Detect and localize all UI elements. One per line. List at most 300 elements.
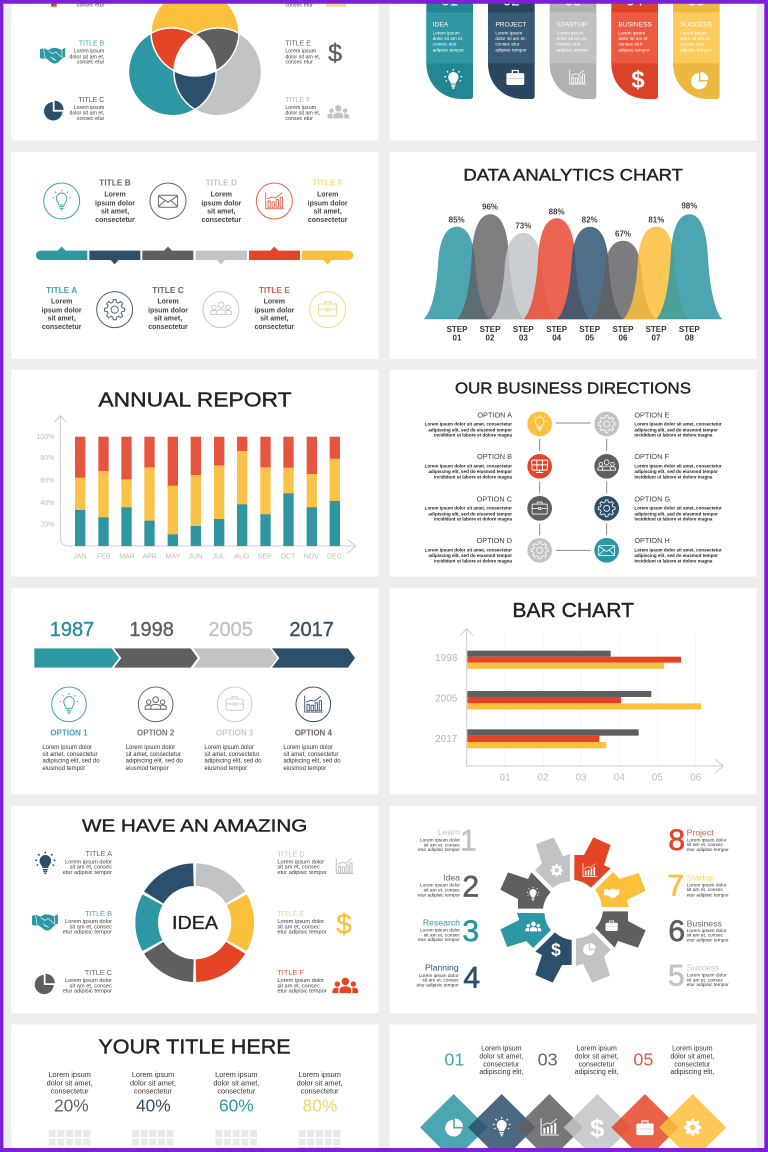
- option text: eiusmod tempor: [283, 766, 326, 772]
- years: 1998: [129, 619, 174, 641]
- step labels: 02: [486, 334, 495, 343]
- number text: adipiscing elit,: [670, 1069, 714, 1076]
- number text: dolor sit amet,: [670, 1054, 714, 1061]
- option text: Lorem ipsum dolor: [42, 745, 92, 751]
- right titles: sit am et, consec: [277, 924, 320, 930]
- left steps: Planning: [425, 963, 459, 973]
- right steps: Lorem ipsum dolor: [687, 838, 727, 844]
- bottom labels: consectetur: [42, 324, 82, 331]
- title: WE HAVE AN AMAZING: [82, 816, 307, 836]
- number text: Lorem ipsum: [481, 1046, 522, 1053]
- percentages: 60%: [219, 1096, 254, 1116]
- left steps: etur adipisic tempor: [418, 937, 460, 943]
- option text: sit amet, consectetur: [283, 752, 339, 758]
- left steps: Research: [423, 917, 460, 927]
- right steps: Startup: [687, 872, 715, 882]
- panel: data analytics chart: [390, 152, 757, 359]
- panel: numbered tabs: [390, 0, 757, 140]
- panel: business directions: [390, 370, 757, 577]
- bottom labels: ipsum dolor: [148, 307, 188, 314]
- option labels: OPTION 4: [295, 728, 333, 737]
- title: YOUR TITLE HERE: [98, 1036, 291, 1058]
- step labels: STEP: [646, 325, 667, 334]
- right steps: 6: [668, 915, 685, 948]
- number text: [479, 1046, 714, 1076]
- left steps: 1: [460, 825, 477, 858]
- left options: adipiscing elit, sed do eiusmod tempor: [428, 469, 512, 474]
- diamond icons: [445, 1115, 701, 1143]
- column text: Lorem ipsum: [48, 1070, 91, 1079]
- bell curves: [424, 214, 722, 319]
- step labels: 07: [652, 334, 661, 343]
- right titles: TITLE F: [277, 968, 304, 977]
- left options: OPTION A: [477, 410, 512, 419]
- top labels: TITLE F: [312, 178, 343, 188]
- option text: Lorem ipsum dolor: [204, 745, 254, 751]
- column text: dolor sit amet,: [130, 1079, 176, 1088]
- bottom labels: sit amet,: [154, 316, 182, 323]
- step labels: STEP: [480, 325, 501, 334]
- step labels: 01: [453, 334, 462, 343]
- number text: Lorem ipsum: [672, 1046, 713, 1053]
- tab 04 business: $: [631, 67, 645, 94]
- option text: sit amet, consectetur: [42, 752, 98, 758]
- axis labels: AUG: [234, 553, 250, 560]
- icon: people: [327, 105, 349, 118]
- right steps: sit am et, consec: [687, 977, 723, 983]
- left steps: etur adipisic tempor: [418, 892, 460, 898]
- column text: consectetur: [51, 1087, 89, 1096]
- left titles: Lorem ipsum dolor: [65, 859, 112, 865]
- percentages: 80%: [303, 1096, 337, 1116]
- tab 04 business: consec etur: [618, 42, 643, 47]
- column text: dolor sit amet,: [297, 1079, 343, 1088]
- tab 02 project: consec etur: [495, 42, 520, 47]
- axis labels: JUN: [189, 553, 202, 560]
- right options: Lorem ipsum dolor sit amet, consectetur: [634, 506, 722, 511]
- icon: handshake: [40, 48, 65, 64]
- bottom labels: [42, 285, 295, 331]
- right options: adipiscing elit, sed do eiusmod tempor: [634, 511, 718, 516]
- node icons: [527, 412, 619, 563]
- segment icons: [525, 863, 619, 960]
- right steps: 7: [667, 870, 684, 903]
- option text: adipiscing elit, sed do: [283, 759, 341, 765]
- right steps: sit am et, consec: [687, 932, 723, 938]
- tab 02 project: PROJECT: [495, 22, 526, 29]
- right steps: Success: [687, 962, 720, 972]
- column text: dolor sit amet,: [213, 1079, 259, 1088]
- left venn labels: TITLE C: [78, 97, 104, 104]
- tab 05 success: Lorem ipsum: [680, 31, 707, 36]
- year labels: 2005: [435, 694, 458, 705]
- column text: Lorem ipsum: [215, 1070, 258, 1079]
- top labels: consectetur: [202, 217, 241, 224]
- panel: annual report: [12, 370, 378, 577]
- step labels: 03: [519, 334, 528, 343]
- panel: gear steps: [390, 806, 757, 1013]
- option text: eiusmod tempor: [42, 766, 85, 772]
- bottom labels: ipsum dolor: [254, 307, 295, 314]
- percent labels: 67%: [615, 229, 631, 238]
- axis labels: [36, 434, 342, 560]
- panel: your title here: [12, 1024, 378, 1152]
- tab 02 project: [488, 0, 535, 99]
- tab 02 project: Lorem ipsum: [495, 31, 522, 36]
- left steps: 4: [463, 962, 480, 995]
- option text: Lorem ipsum dolor: [126, 745, 175, 751]
- right steps: Project: [687, 828, 714, 838]
- tab 04 business: [611, 0, 658, 99]
- axis labels: 80%: [40, 455, 54, 462]
- left venn labels: TITLE B: [79, 41, 105, 48]
- left steps: etur adipisic tempor: [417, 982, 459, 988]
- cropped top labels: consec etur: [285, 3, 313, 9]
- tab 05 success: [673, 0, 720, 99]
- left steps: Learn: [438, 827, 460, 837]
- axis labels: MAY: [166, 553, 181, 560]
- x labels: 02: [537, 772, 549, 783]
- tab 02 project: adipisic tempor: [495, 47, 527, 52]
- left options: Lorem ipsum dolor sit amet, consectetur: [425, 463, 512, 468]
- option labels: OPTION 3: [216, 728, 254, 737]
- left titles: etur adipisic tempor: [63, 930, 112, 936]
- option text: adipiscing elit, sed do: [126, 759, 184, 765]
- step labels: STEP: [679, 325, 700, 334]
- right options: OPTION E: [634, 410, 669, 419]
- axis labels: NOV: [304, 553, 319, 560]
- step labels: [447, 325, 700, 343]
- left steps: sit am et, consec: [424, 932, 461, 938]
- left titles: Lorem ipsum dolor: [65, 919, 112, 925]
- numbers: 05: [633, 1050, 653, 1070]
- years: [50, 619, 334, 641]
- left titles: TITLE B: [85, 909, 112, 918]
- step labels: 08: [685, 334, 694, 343]
- years: 2005: [208, 619, 253, 641]
- top labels: ipsum dolor: [308, 200, 348, 207]
- right options: OPTION H: [634, 536, 670, 545]
- top labels: consectetur: [308, 217, 348, 224]
- tab 01 idea: dolor sit am et,: [433, 36, 463, 41]
- top labels: Lorem: [317, 192, 338, 199]
- number text: adipiscing elit,: [575, 1069, 619, 1076]
- option text: adipiscing elit, sed do: [204, 759, 262, 765]
- left titles: etur adipisic tempor: [63, 870, 112, 876]
- right options: Lorem ipsum dolor sit amet, consectetur: [634, 463, 722, 468]
- panel: bar chart: [390, 588, 757, 794]
- step labels: STEP: [613, 325, 634, 334]
- tab 04 business: BUSINESS: [618, 22, 653, 29]
- axis labels: APR: [142, 553, 157, 560]
- right steps: Business: [687, 918, 722, 928]
- bottom labels: TITLE C: [152, 285, 184, 295]
- years: 2017: [289, 619, 334, 641]
- bottom labels: Lorem: [157, 299, 179, 306]
- left options: Lorem ipsum dolor sit amet, consectetur: [425, 506, 512, 511]
- number text: consectetur: [483, 1061, 520, 1068]
- cropped top labels: [51, 0, 346, 9]
- left options: [425, 410, 513, 563]
- left titles: [63, 849, 113, 995]
- percent labels: 73%: [515, 222, 531, 231]
- bottom labels: Lorem: [51, 299, 72, 306]
- tab 01 idea: Lorem ipsum: [433, 31, 460, 36]
- right titles: etur adipisic tempor: [277, 930, 327, 936]
- panel: donut idea: [12, 806, 378, 1013]
- right titles: TITLE E: [277, 909, 304, 918]
- column text: consectetur: [134, 1087, 172, 1096]
- center label: IDEA: [172, 912, 219, 933]
- step labels: STEP: [546, 325, 568, 334]
- column text: consectetur: [301, 1087, 339, 1096]
- column text: consectetur: [217, 1087, 256, 1096]
- tab 03 startup: STARTUP: [557, 22, 588, 29]
- icons: $: [336, 909, 352, 940]
- right titles: Lorem ipsum dolor: [277, 919, 324, 925]
- right steps: etur adipisic tempor: [687, 892, 729, 898]
- bottom labels: TITLE E: [259, 285, 290, 295]
- step labels: STEP: [513, 325, 534, 334]
- option text: eiusmod tempor: [204, 766, 247, 772]
- right venn labels: TITLE F: [285, 97, 311, 104]
- right options: Lorem ipsum dolor sit amet, consectetur: [634, 422, 722, 427]
- title: OUR BUSINESS DIRECTIONS: [455, 380, 691, 397]
- percent labels: 85%: [449, 215, 465, 224]
- right titles: [277, 849, 327, 995]
- right titles: sit am et, consec: [277, 983, 320, 989]
- option text: [42, 745, 341, 772]
- left venn labels: [69, 41, 105, 122]
- diamond icons: $: [590, 1115, 604, 1143]
- top labels: sit amet,: [313, 209, 342, 216]
- right steps: [667, 824, 729, 993]
- right options: OPTION F: [634, 452, 669, 461]
- segment icons: $: [551, 940, 561, 960]
- top labels: Lorem: [104, 192, 126, 199]
- axes: [54, 416, 356, 553]
- panel: icon timeline titles: [12, 152, 378, 359]
- connectors: [540, 423, 607, 550]
- numbers: 01: [444, 1050, 464, 1070]
- left titles: TITLE A: [86, 849, 112, 858]
- tab 03 startup: consec etur: [557, 42, 581, 47]
- top labels: TITLE D: [206, 178, 237, 188]
- year labels: 2017: [435, 734, 458, 745]
- tab 03 startup: Lorem ipsum: [557, 31, 584, 36]
- left titles: TITLE C: [85, 968, 113, 977]
- left options: adipiscing elit, sed do eiusmod tempor: [428, 427, 512, 432]
- top labels: sit amet,: [207, 209, 236, 216]
- percentages: [54, 1096, 337, 1116]
- tab 01 idea: adipisic tempor: [433, 47, 464, 52]
- left steps: sit am et, consec: [422, 977, 459, 983]
- right venn labels: dolor sit am et,: [285, 111, 320, 117]
- left venn labels: consec etur: [77, 60, 105, 66]
- number text: Lorem ipsum: [576, 1046, 617, 1053]
- horizontal bars: [467, 651, 701, 748]
- top labels: [95, 178, 348, 224]
- title: BAR CHART: [512, 600, 634, 622]
- option labels: OPTION 2: [137, 728, 175, 737]
- right options: Lorem ipsum dolor sit amet, consectetur: [634, 547, 722, 552]
- right titles: Lorem ipsum dolor: [277, 859, 324, 865]
- numbers: [444, 1050, 653, 1070]
- right steps: Lorem ipsum dolor: [687, 973, 727, 979]
- right venn labels: dolor sit am et,: [285, 54, 320, 60]
- left venn labels: consec etur: [77, 116, 105, 122]
- step labels: 06: [619, 334, 628, 343]
- left options: adipiscing elit, sed do eiusmod tempor: [428, 511, 512, 516]
- tab 03 startup: [550, 0, 596, 99]
- percent labels: 81%: [648, 215, 664, 224]
- title: ANNUAL REPORT: [98, 389, 292, 412]
- axis labels: 60%: [40, 477, 54, 484]
- axis labels: FEB: [97, 553, 111, 560]
- diamond row: [420, 1094, 726, 1152]
- tab 02 project: dolor sit am et,: [495, 36, 526, 41]
- left options: OPTION C: [477, 494, 513, 503]
- top labels: sit amet,: [101, 209, 129, 216]
- right venn labels: Lorem ipsum: [285, 105, 317, 111]
- bottom labels: consectetur: [148, 324, 188, 331]
- percent labels: 88%: [549, 207, 565, 216]
- percent labels: 98%: [681, 201, 697, 210]
- left steps: Lorem ipsum dolor: [419, 973, 459, 979]
- axis labels: OCT: [281, 553, 296, 560]
- option text: sit amet, consectetur: [204, 752, 260, 758]
- right steps: Lorem ipsum dolor: [687, 928, 727, 934]
- year labels: 1998: [435, 653, 458, 664]
- axis labels: 100%: [36, 434, 54, 441]
- right options: incididunt ut labore et dolore magna: [634, 474, 713, 479]
- title: DATA ANALYTICS CHART: [463, 166, 683, 185]
- step labels: STEP: [447, 325, 468, 334]
- segmented bar: [36, 247, 353, 264]
- right titles: sit am et, consec: [277, 865, 320, 871]
- right steps: etur adipisic tempor: [687, 847, 729, 853]
- step labels: 04: [552, 334, 562, 343]
- tab 03 startup: dolor sit am et,: [557, 36, 587, 41]
- chevron arrows: [34, 648, 355, 668]
- option text: Lorem ipsum dolor: [283, 745, 333, 751]
- right venn labels: consec etur: [285, 116, 313, 122]
- left options: incididunt ut labore et dolore magna: [434, 474, 512, 479]
- tab 05 success: adipisic tempor: [680, 47, 712, 52]
- top labels: ipsum dolor: [201, 200, 242, 207]
- right venn labels: TITLE E: [285, 41, 311, 48]
- right titles: TITLE D: [277, 849, 305, 858]
- x labels: 06: [690, 772, 702, 783]
- left steps: Lorem ipsum dolor: [420, 883, 460, 889]
- bottom labels: sit amet,: [260, 316, 289, 323]
- panel: venn diagram: [12, 0, 378, 140]
- x labels: 03: [575, 772, 587, 783]
- column text: Lorem ipsum: [298, 1070, 341, 1079]
- left venn labels: dolor sit am et,: [69, 111, 104, 117]
- right titles: etur adipisic tempor: [277, 870, 327, 876]
- right steps: sit am et, consec: [687, 842, 723, 848]
- tab 04 business: Lorem ipsum: [618, 31, 645, 36]
- column text: Lorem ipsum: [132, 1070, 174, 1079]
- left steps: [417, 825, 480, 995]
- years: 1987: [50, 619, 94, 641]
- tab 05 success: SUCCESS: [680, 22, 713, 29]
- left venn labels: dolor sit am et,: [69, 54, 104, 60]
- numbers: 03: [538, 1050, 558, 1070]
- axis labels: DEC: [327, 553, 342, 560]
- left titles: etur adipisic tempor: [63, 989, 112, 995]
- axis labels: SEP: [258, 553, 272, 560]
- left venn labels: Lorem ipsum: [74, 105, 105, 111]
- right options: adipiscing elit, sed do eiusmod tempor: [634, 469, 718, 474]
- right options: adipiscing elit, sed do eiusmod tempor: [634, 553, 718, 558]
- right options: incididunt ut labore et dolore magna: [634, 433, 713, 438]
- left steps: 2: [462, 871, 479, 904]
- left titles: sit am et, consec: [70, 924, 112, 930]
- option labels: OPTION 1: [50, 728, 88, 737]
- column text: dolor sit amet,: [47, 1079, 93, 1088]
- axis labels: 40%: [40, 500, 54, 507]
- waffle squares: [49, 1130, 340, 1152]
- tab 01 idea: IDEA: [433, 22, 449, 29]
- left options: OPTION D: [477, 536, 512, 545]
- icon: dollar: $: [328, 39, 342, 67]
- number text: consectetur: [579, 1061, 615, 1068]
- left options: incididunt ut labore et dolore magna: [434, 517, 512, 522]
- year labels: [435, 653, 458, 745]
- right steps: 8: [668, 824, 685, 857]
- left options: OPTION B: [477, 452, 512, 461]
- right options: incididunt ut labore et dolore magna: [634, 558, 713, 563]
- left options: incididunt ut labore et dolore magna: [434, 433, 512, 438]
- right options: adipiscing elit, sed do eiusmod tempor: [634, 427, 718, 432]
- x labels: 01: [499, 772, 511, 783]
- x labels: 04: [614, 772, 625, 783]
- tab 01 idea: consec etur: [433, 42, 457, 47]
- bottom labels: TITLE A: [46, 285, 77, 295]
- left titles: sit am et, consec: [70, 865, 112, 871]
- x labels: 05: [652, 772, 663, 783]
- tab 05 success: consec etur: [680, 42, 705, 47]
- right steps: etur adipisic tempor: [687, 938, 729, 944]
- percent labels: 96%: [482, 203, 498, 212]
- axes: [460, 628, 723, 773]
- option labels: [50, 728, 333, 737]
- right options: OPTION G: [634, 494, 670, 503]
- bottom labels: consectetur: [255, 324, 294, 331]
- bottom labels: Lorem: [264, 299, 285, 306]
- right steps: etur adipisic tempor: [687, 982, 729, 988]
- top labels: Lorem: [211, 192, 232, 199]
- number text: consectetur: [674, 1061, 711, 1068]
- x labels: [499, 772, 702, 783]
- axis labels: MAR: [119, 553, 135, 560]
- icon: pie: [44, 101, 64, 120]
- bottom labels: ipsum dolor: [42, 307, 82, 314]
- percent labels: 82%: [582, 215, 598, 224]
- left steps: Lorem ipsum dolor: [420, 928, 460, 934]
- gear segments: [495, 832, 651, 988]
- number text: dolor sit amet,: [479, 1054, 523, 1061]
- left steps: etur adipisic tempor: [418, 847, 460, 853]
- right venn labels: [285, 41, 320, 122]
- left options: adipiscing elit, sed do eiusmod tempor: [428, 553, 512, 558]
- left steps: Lorem ipsum dolor: [420, 837, 460, 843]
- right steps: sit am et, consec: [687, 887, 723, 893]
- left options: Lorem ipsum dolor sit amet, consectetur: [425, 547, 512, 552]
- left steps: 3: [462, 915, 479, 948]
